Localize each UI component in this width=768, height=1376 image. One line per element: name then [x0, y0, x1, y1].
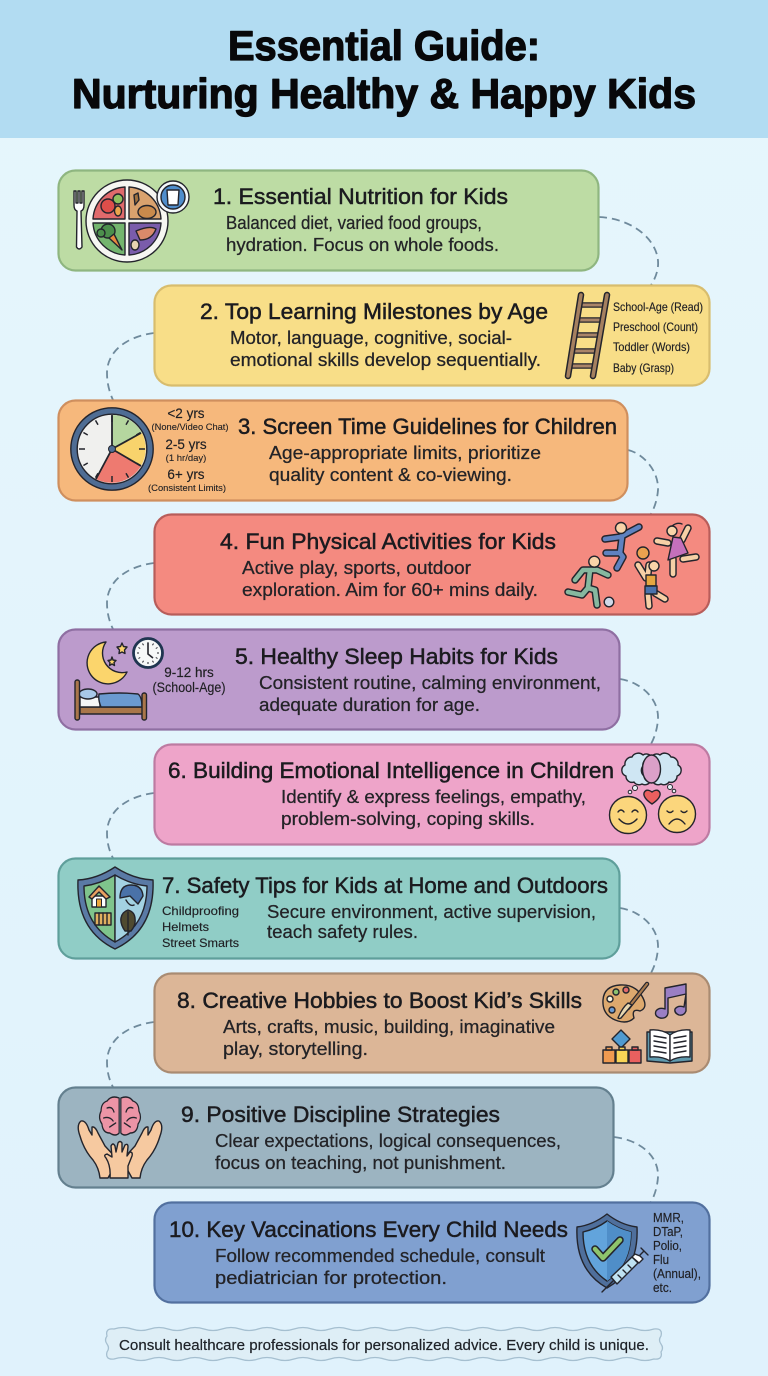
icon: thought clouds, heart and faces: [610, 753, 696, 834]
icon: palette, note, blocks and book: [603, 984, 692, 1063]
body 3: [269, 443, 541, 485]
dashed connector 2 to 3: [107, 333, 154, 400]
sleep duration label: [152, 665, 226, 695]
age limits: <2 yrs: [167, 406, 205, 421]
body 10: Follow recommended schedule, consult: [215, 1246, 545, 1266]
sleep duration label: 9-12 hrs: [164, 665, 214, 680]
body 8: Arts, crafts, music, building, imaginative: [223, 1017, 555, 1037]
icon: moon, stars, clock and bed: [75, 638, 162, 720]
icon: brain over caring hands: [78, 1097, 162, 1178]
panel: 3 screen time: [58, 400, 628, 500]
body 6: [281, 787, 586, 829]
dashed connector 7 to 8: [620, 908, 658, 973]
dashed connector 4 to 5: [107, 563, 154, 629]
milestone labels: Toddler (Words): [613, 340, 690, 354]
footer note: [106, 1328, 662, 1360]
body 4: [242, 558, 538, 600]
body 1: Balanced diet, varied food groups,: [226, 213, 482, 233]
body 10: pediatrician for protection.: [215, 1268, 447, 1288]
heading 2: 2. Top Learning Milestones by Age: [200, 299, 548, 324]
dashed connector 5 to 6: [620, 679, 658, 744]
body 10: [215, 1246, 545, 1288]
safety list: Helmets: [162, 920, 209, 934]
vaccine list: MMR,: [653, 1211, 684, 1225]
vaccine list: [653, 1211, 701, 1295]
milestone labels: School-Age (Read): [613, 300, 703, 314]
vaccine list: etc.: [653, 1281, 672, 1295]
body 5: [259, 673, 601, 715]
body 5: adequate duration for age.: [259, 695, 480, 715]
icon: shield and syringe: [577, 1214, 648, 1292]
icon: safety shield: [78, 867, 153, 949]
heading 9: 9. Positive Discipline Strategies: [181, 1102, 500, 1127]
safety list: [162, 904, 239, 950]
vaccine list: Flu: [653, 1253, 669, 1267]
vaccine list: (Annual),: [653, 1267, 701, 1281]
vaccine list: Polio,: [653, 1239, 682, 1253]
body 8: play, storytelling.: [223, 1039, 368, 1059]
age limits: 2-5 yrs: [165, 437, 207, 452]
panel: 7 safety tips: [58, 858, 620, 958]
body 9: focus on teaching, not punishment.: [215, 1153, 506, 1173]
panel: 10 vaccinations: [154, 1202, 710, 1302]
heading 3: 3. Screen Time Guidelines for Children: [238, 414, 617, 439]
panel: 8 creative hobbies: [154, 974, 710, 1072]
dashed connector 3 to 4: [628, 450, 658, 514]
header band with title: Nurturing Healthy & Happy Kids: [72, 70, 696, 117]
age limits: (None/Video Chat): [152, 422, 228, 433]
dashed connector 9 to 10: [614, 1137, 658, 1202]
heading 7: 7. Safety Tips for Kids at Home and Outdoors: [162, 873, 608, 898]
panel: 5 sleep habits: [58, 630, 620, 730]
body 7: [267, 902, 596, 942]
panel: 4 physical activities: [154, 514, 710, 614]
milestone labels: Baby (Grasp): [613, 361, 674, 375]
dashed connector 8 to 9: [107, 1022, 154, 1087]
body 2: Motor, language, cognitive, social-: [230, 328, 512, 348]
body 6: Identify & express feelings, empathy,: [281, 787, 586, 807]
body 1: [226, 213, 499, 255]
heading 4: 4. Fun Physical Activities for Kids: [220, 529, 556, 554]
safety list: Childproofing: [162, 904, 239, 918]
body 8: [223, 1017, 555, 1059]
panel: 1 nutrition: [58, 170, 598, 270]
panel: 2 learning milestones: [154, 286, 710, 386]
body 5: Consistent routine, calming environment,: [259, 673, 601, 693]
safety list: Street Smarts: [162, 936, 239, 950]
dashed connector 6 to 7: [107, 793, 154, 858]
body 3: Age-appropriate limits, prioritize: [269, 443, 541, 463]
vaccine list: DTaP,: [653, 1225, 683, 1239]
footer note: Consult healthcare professionals for personalized advice. Every child is unique.: [119, 1337, 649, 1354]
body 2: emotional skills develop sequentially.: [230, 350, 541, 370]
heading 5: 5. Healthy Sleep Habits for Kids: [235, 644, 558, 669]
body 9: [215, 1131, 561, 1173]
heading 10: 10. Key Vaccinations Every Child Needs: [169, 1217, 568, 1242]
milestone labels: Preschool (Count): [613, 320, 698, 334]
milestone labels: [613, 300, 703, 375]
icon: clock with age sectors: [71, 408, 153, 490]
dashed connector 1 to 2: [599, 217, 658, 285]
body 7: teach safety rules.: [267, 922, 418, 942]
header band with title: Essential Guide:: [228, 22, 540, 69]
icon: children playing: [568, 522, 696, 607]
panel: 6 emotional intelligence: [154, 744, 710, 844]
panel: 9 positive discipline: [58, 1088, 614, 1188]
body 6: problem-solving, coping skills.: [281, 809, 535, 829]
body 9: Clear expectations, logical consequences,: [215, 1131, 561, 1151]
age limits: [148, 406, 228, 494]
body 3: quality content & co-viewing.: [269, 465, 512, 485]
sleep duration label: (School-Age): [152, 680, 226, 695]
heading 8: 8. Creative Hobbies to Boost Kid’s Skills: [177, 988, 582, 1013]
icon: ladder: [568, 295, 607, 376]
body 7: Secure environment, active supervision,: [267, 902, 596, 922]
age limits: (1 hr/day): [166, 453, 206, 464]
body 4: exploration. Aim for 60+ mins daily.: [242, 580, 538, 600]
body 4: Active play, sports, outdoor: [242, 558, 471, 578]
icon: fork and plate with water glass: [74, 180, 189, 262]
header band with title: [0, 0, 768, 138]
body 1: hydration. Focus on whole foods.: [226, 235, 499, 255]
age limits: (Consistent Limits): [148, 483, 226, 494]
heading 1: 1. Essential Nutrition for Kids: [213, 184, 508, 209]
body 2: [230, 328, 541, 370]
heading 6: 6. Building Emotional Intelligence in Children: [168, 758, 614, 783]
age limits: 6+ yrs: [167, 467, 205, 482]
